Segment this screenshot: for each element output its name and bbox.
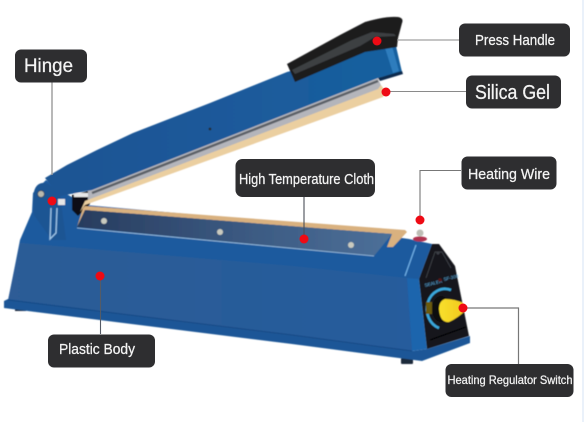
temperature dial arc: [427, 289, 451, 328]
foot: right: [401, 358, 413, 364]
leader line: hinge: [51, 82, 53, 175]
press handle: grip highlight: [292, 32, 396, 74]
upper arm: dark groove: [92, 81, 378, 193]
label: High Temperature Cloth: [236, 159, 375, 197]
label: High Temperature Cloth: High Temperature Cloth: [239, 172, 374, 188]
body: side highlight: [405, 245, 416, 276]
red dot: regulator switch: [458, 304, 468, 312]
red dot: press handle: [372, 36, 382, 46]
leader line: press handle: [397, 39, 459, 41]
plate screw: right: [348, 242, 354, 248]
body: flange: [4, 299, 470, 361]
label: Press Handle: [459, 24, 570, 56]
body: lower front face: [8, 243, 412, 351]
panel model: SF-300: [443, 273, 459, 282]
upper arm: silver bar: [88, 78, 382, 202]
leader line: plastic body: [100, 276, 102, 334]
upper arm: blue top plate: [45, 42, 402, 196]
upper arm: rivet: [209, 128, 211, 130]
red dot: plastic body: [96, 272, 104, 280]
panel label: SEALER: [424, 279, 443, 288]
label: Hinge: [15, 50, 87, 82]
body: flange highlight: [8, 300, 412, 351]
leader line: high temperature cloth: [303, 197, 305, 239]
cloth and plate: [77, 206, 407, 256]
indicator light: [438, 278, 442, 282]
body: main housing: [4, 180, 470, 361]
label: Silica Gel: Silica Gel: [475, 82, 550, 104]
body: side face: [407, 278, 427, 351]
press handle: black grip: [287, 17, 402, 82]
label: Heating Regulator Switch: [446, 364, 574, 397]
upper arm: end cap highlight: [385, 46, 399, 73]
red dot: heating wire: [416, 216, 424, 224]
label: Plastic Body: [48, 334, 155, 368]
hinge: pillar and bolt: [33, 183, 92, 240]
label: Silica Gel: [466, 76, 561, 108]
power button: [413, 230, 427, 242]
leader line: heating wire: [420, 170, 461, 220]
label: Heating Wire: [462, 156, 556, 190]
red dot: hinge: [48, 196, 56, 206]
label: Heating Wire: Heating Wire: [468, 167, 550, 183]
upper arm: tan silica strip: [80, 85, 386, 212]
yellow knob: [439, 299, 466, 322]
label: Press Handle: Press Handle: [475, 33, 555, 49]
red dot: high temperature cloth: [300, 234, 308, 244]
control panel: [419, 244, 469, 349]
label: Plastic Body: Plastic Body: [59, 342, 136, 358]
plate screw: left: [101, 218, 107, 224]
upper arm: end opening: [378, 71, 403, 81]
plate screw: middle: [217, 229, 223, 235]
dial left mark: [426, 302, 432, 314]
foot: left: [15, 306, 26, 311]
knob base: [432, 296, 450, 322]
label: Heating Regulator Switch: Heating Regulator Switch: [448, 373, 572, 387]
red dot: silica gel: [382, 88, 390, 96]
leader line: silica gel: [386, 90, 466, 92]
label: Hinge: Hinge: [24, 55, 73, 77]
heat sealer machine: [4, 17, 470, 364]
leader line: regulator switch: [463, 308, 518, 364]
